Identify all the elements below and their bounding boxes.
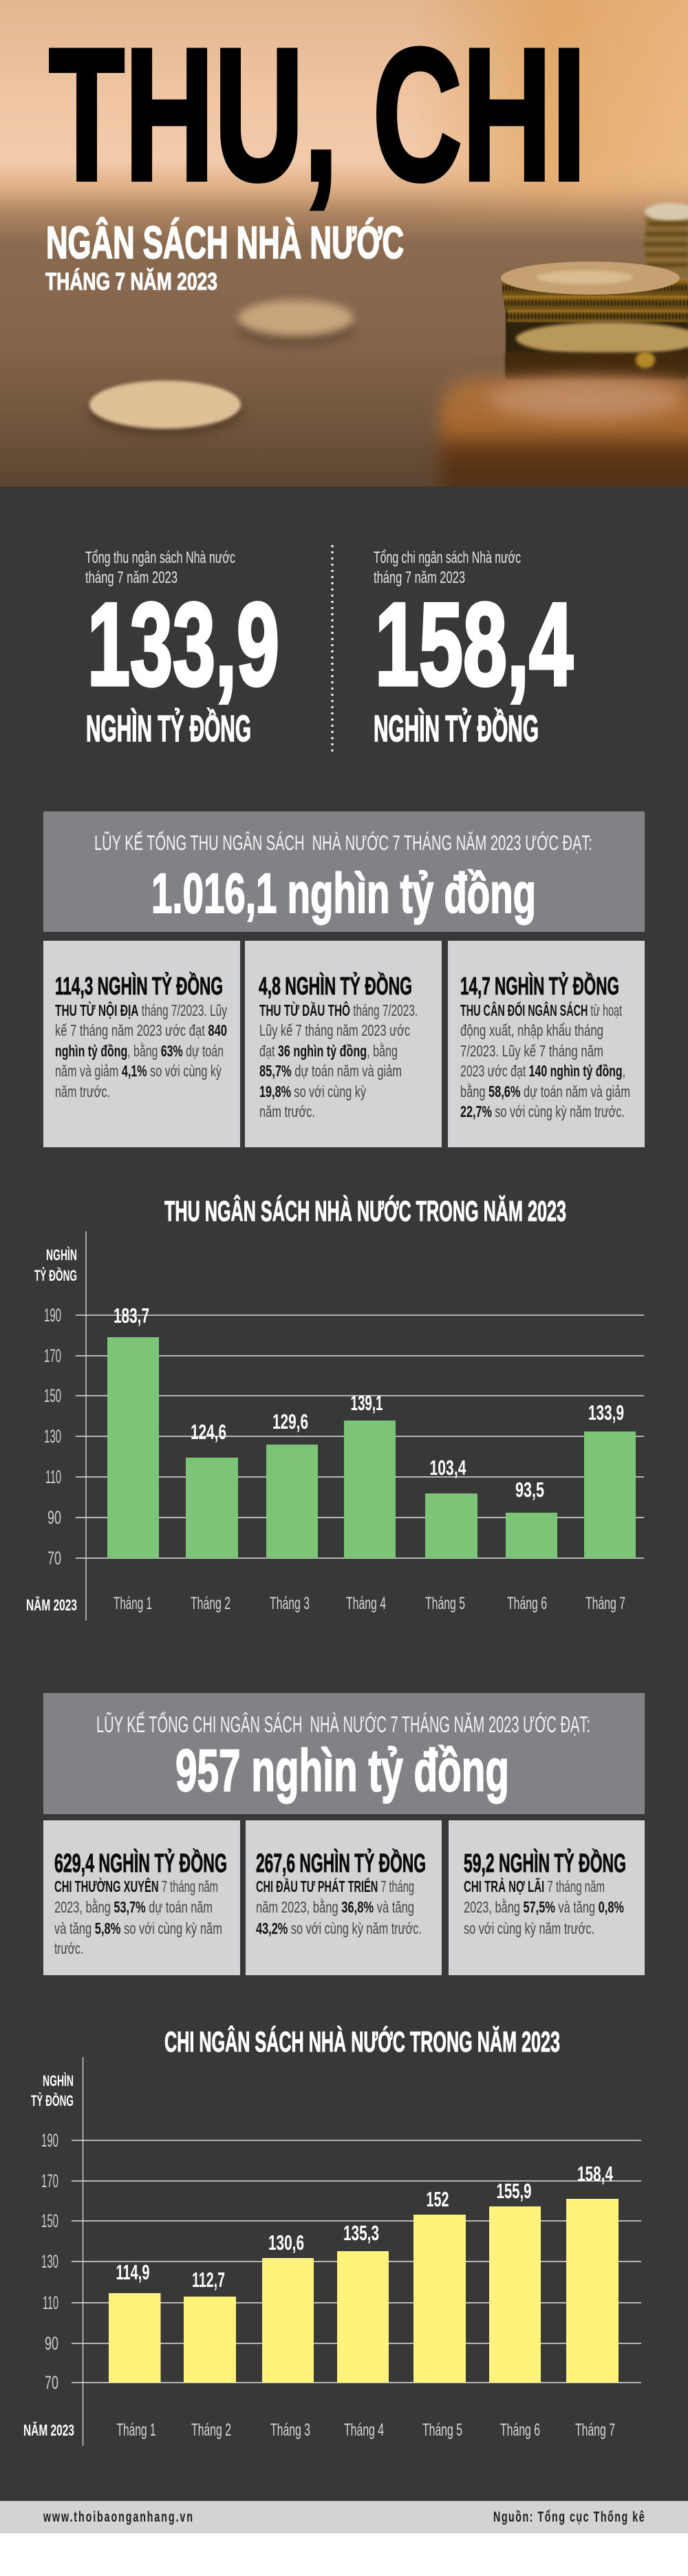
bar chart: monthly revenue: 183,7 xyxy=(114,1303,149,1328)
panel: monthly totals xyxy=(85,545,573,756)
bar chart: monthly revenue: Tháng 5 xyxy=(425,1594,465,1613)
bar chart: monthly revenue: 110 xyxy=(45,1467,61,1487)
card: crude oil revenue: Lũy kế 7 tháng năm 2023 ước xyxy=(259,1021,410,1039)
panel: cumulative expenditure xyxy=(43,1693,645,1814)
bar chart: monthly revenue: 124,6 xyxy=(191,1420,226,1444)
source: Nguồn: Tổng cục Thống kê xyxy=(493,2509,645,2525)
bar chart: monthly revenue: 70 xyxy=(47,1548,61,1568)
bar chart: monthly revenue: TỶ ĐỒNG xyxy=(34,1267,77,1284)
bar chart: monthly expenditure: 90 xyxy=(45,2333,58,2354)
card: trade balance revenue: 7/2023. Lũy kế 7 tháng năm xyxy=(460,1042,603,1060)
bar chart: monthly expenditure: 110 xyxy=(43,2292,58,2313)
bar chart: monthly revenue: Tháng 7 xyxy=(585,1594,625,1613)
bar chart: monthly revenue: Tháng 3 xyxy=(270,1594,310,1613)
bar chart: monthly revenue: NGHÌN xyxy=(46,1246,77,1264)
card: trade balance revenue: động xuất, nhập khẩu tháng xyxy=(460,1021,603,1039)
card: trade balance revenue: 22,7% so với cùng kỳ năm trước. xyxy=(460,1103,625,1120)
total expenditure block: 158,4 xyxy=(375,579,573,710)
bar chart: monthly revenue: 129,6 xyxy=(272,1409,308,1434)
bar chart: monthly expenditure: Tháng 6 xyxy=(500,2420,540,2440)
card: debt interest spending xyxy=(449,1820,645,1975)
card: crude oil revenue: 4,8 NGHÌN TỶ ĐỒNG xyxy=(259,971,412,1000)
subtitle: NGÂN SÁCH NHÀ NƯỚC xyxy=(46,217,404,268)
card: development investment spending: CHI ĐẦU TƯ PHÁT TRIỂN 7 tháng xyxy=(256,1877,414,1895)
bar chart: monthly revenue: Tháng 4 xyxy=(346,1594,386,1613)
bar chart: monthly revenue: 93,5 xyxy=(515,1478,544,1502)
card: crude oil revenue: 19,8% so với cùng kỳ xyxy=(259,1083,366,1100)
total revenue block: Tổng thu ngân sách Nhà nước xyxy=(85,549,235,567)
bar chart: monthly expenditure: 152 xyxy=(427,2187,449,2211)
website: www.thoibaonganhang.vn xyxy=(43,2509,193,2525)
bar chart: monthly expenditure: 155,9 xyxy=(497,2179,531,2203)
total revenue block: 133,9 xyxy=(87,579,279,710)
total expenditure block: tháng 7 năm 2023 xyxy=(374,568,465,587)
bar chart: monthly revenue: 130 xyxy=(44,1426,61,1447)
bar chart: monthly expenditure xyxy=(23,2057,641,2446)
card: domestic revenue: nghìn tỷ đồng, bằng 63% dự toán xyxy=(55,1042,224,1060)
card: domestic revenue xyxy=(43,941,240,1147)
bar chart: monthly expenditure: 150 xyxy=(41,2211,58,2231)
card: trade balance revenue: THU CÂN ĐỐI NGÂN SÁCH từ hoạt xyxy=(460,1001,622,1019)
total expenditure block: Tổng chi ngân sách Nhà nước xyxy=(374,549,521,567)
bar chart: monthly expenditure: NĂM 2023 xyxy=(23,2420,74,2439)
card: crude oil revenue: năm trước. xyxy=(259,1103,315,1120)
total expenditure block xyxy=(374,549,573,749)
card: recurrent spending: 629,4 NGHÌN TỶ ĐỒNG xyxy=(54,1848,227,1878)
bar chart: monthly revenue: 139,1 xyxy=(351,1391,383,1415)
card: development investment spending: 43,2% so với cùng kỳ năm trước. xyxy=(256,1919,422,1937)
bar chart: monthly expenditure: 130 xyxy=(41,2251,58,2272)
bar chart: monthly expenditure: 170 xyxy=(41,2171,58,2191)
total revenue block: NGHÌN TỶ ĐỒNG xyxy=(86,708,251,749)
card: trade balance revenue: bằng 58,6% dự toán năm và giảm xyxy=(460,1083,630,1100)
footer xyxy=(0,2501,688,2533)
bar chart: monthly expenditure: Tháng 1 xyxy=(117,2420,155,2440)
total revenue block xyxy=(85,549,279,749)
card: crude oil revenue: đạt 36 nghìn tỷ đồng, bằng xyxy=(259,1042,398,1060)
bar chart: monthly revenue: Tháng 1 xyxy=(114,1594,152,1613)
card: domestic revenue: THU TỪ NỘI ĐỊA tháng 7/2023. Lũy xyxy=(55,1001,227,1019)
bar chart: monthly expenditure: Tháng 4 xyxy=(344,2420,384,2440)
card: recurrent spending: 2023, bằng 53,7% dự toán năm xyxy=(54,1898,213,1916)
card: development investment spending: 267,6 NGHÌN TỶ ĐỒNG xyxy=(256,1848,426,1878)
card: domestic revenue: năm trước. xyxy=(55,1083,110,1100)
card: domestic revenue: 114,3 NGHÌN TỶ ĐỒNG xyxy=(55,971,223,1000)
bar chart: monthly expenditure: Tháng 7 xyxy=(575,2420,615,2440)
card: development investment spending xyxy=(246,1820,442,1975)
card: domestic revenue: năm và giảm 4,1% so với cùng kỳ xyxy=(55,1062,222,1080)
bar chart: monthly revenue: 170 xyxy=(44,1345,61,1366)
bar chart: monthly revenue: 90 xyxy=(47,1507,61,1528)
card: debt interest spending: so với cùng kỳ năm trước. xyxy=(464,1919,594,1937)
bar chart: monthly expenditure: Tháng 5 xyxy=(422,2420,462,2440)
bar chart: monthly revenue: Tháng 2 xyxy=(191,1594,230,1613)
bar chart: monthly revenue: 133,9 xyxy=(588,1401,624,1425)
bar chart: monthly expenditure: 130,6 xyxy=(268,2231,304,2255)
bar chart: monthly expenditure: 114,9 xyxy=(116,2260,150,2284)
card: crude oil revenue xyxy=(245,941,442,1147)
card: recurrent spending xyxy=(43,1820,240,1975)
hero photo of coins xyxy=(0,0,688,509)
bar chart: monthly revenue: Tháng 6 xyxy=(507,1594,547,1613)
cumulative expenditure value: 957 nghìn tỷ đồng xyxy=(175,1738,509,1804)
card: development investment spending: năm 2023, bằng 36,8% và tăng xyxy=(256,1898,414,1916)
card: debt interest spending: CHI TRẢ NỢ LÃI 7 tháng năm xyxy=(464,1876,605,1895)
card: recurrent spending: và tăng 5,8% so với cùng kỳ năm xyxy=(54,1919,222,1937)
bar chart: monthly revenue: NĂM 2023 xyxy=(26,1595,77,1614)
bar chart: monthly revenue: 190 xyxy=(44,1305,61,1326)
card: domestic revenue: kế 7 tháng năm 2023 ước đạt 840 xyxy=(55,1021,227,1039)
date line: THÁNG 7 NĂM 2023 xyxy=(45,268,217,295)
bar chart: monthly expenditure: 190 xyxy=(41,2130,58,2151)
bar chart: monthly revenue xyxy=(26,1231,644,1621)
card: crude oil revenue: THU TỪ DẦU THÔ tháng 7/2023. xyxy=(259,1001,418,1019)
card: recurrent spending: trước. xyxy=(54,1939,83,1957)
bar chart: monthly expenditure: Tháng 2 xyxy=(191,2420,231,2440)
panel: hero banner xyxy=(0,0,688,509)
bar chart: monthly expenditure: 70 xyxy=(45,2372,58,2393)
bar chart: monthly expenditure: 135,3 xyxy=(343,2221,379,2245)
bar chart: monthly expenditure: Tháng 3 xyxy=(270,2420,310,2440)
bar chart: monthly expenditure: 158,4 xyxy=(577,2162,614,2186)
card: trade balance revenue: 2023 ước đạt 140 nghìn tỷ đồng, xyxy=(460,1062,625,1080)
card: crude oil revenue: 85,7% dự toán năm và giảm xyxy=(259,1062,402,1080)
card: recurrent spending: CHI THƯỜNG XUYÊN 7 tháng năm xyxy=(54,1877,218,1895)
bar chart: monthly expenditure: TỶ ĐỒNG xyxy=(31,2092,74,2109)
card: trade balance revenue xyxy=(448,941,645,1147)
card: debt interest spending: 2023, bằng 57,5% và tăng 0,8% xyxy=(464,1898,624,1916)
divider dots xyxy=(332,545,333,756)
bar chart: monthly expenditure: 112,7 xyxy=(192,2268,225,2292)
total expenditure block: NGHÌN TỶ ĐỒNG xyxy=(374,708,539,749)
panel: cumulative revenue xyxy=(43,811,645,932)
bar chart: monthly revenue: 150 xyxy=(44,1385,61,1406)
bar chart: monthly expenditure: NGHÌN xyxy=(43,2072,74,2089)
bar chart: monthly revenue: 103,4 xyxy=(429,1456,466,1480)
total revenue block: tháng 7 năm 2023 xyxy=(85,568,178,587)
